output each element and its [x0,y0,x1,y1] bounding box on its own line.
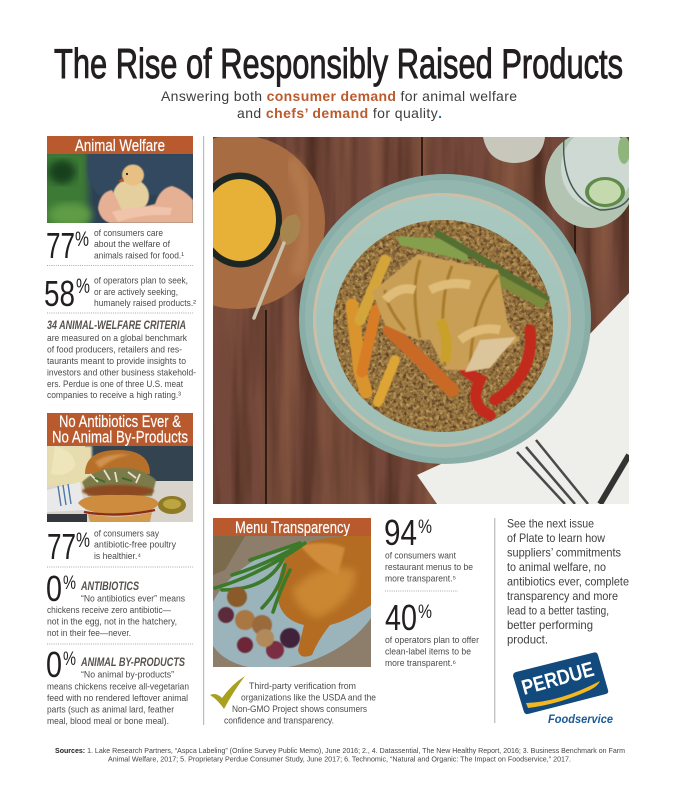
stat: 0% animal by-products: means chickens receive all-vegetarian [47,682,189,692]
text block: see the next issue: of Plate to learn how [507,531,605,545]
stat: 94% want transparent menus: % [418,517,432,538]
stat: 40% clean-label [385,597,479,668]
stat: 58% operators: of operators plan to seek, [94,276,188,286]
stat: 77% care about welfare: 77 [46,225,75,266]
text block: see the next issue: product. [507,632,548,646]
stat: 40% clean-label: of operators plan to offer [385,635,479,645]
stat: 0% antibiotics: % [63,573,76,594]
panel: animal welfare [40,136,196,400]
stat: 0% animal by-products: % [63,649,76,670]
text block: third-party verification: organizations like the USDA and the [241,692,376,702]
text block: see the next issue: suppliers’ commitments [507,546,621,560]
text block: see the next issue [507,516,629,646]
stat: 94% want transparent menus: 94 [384,512,417,553]
text block: 34 animal-welfare criteria: 34 ANIMAL-WELFARE CRITERIA [47,318,186,332]
stat: 0% animal by-products: feed with no rendered leftover animal [47,693,188,703]
stat: 77% care about welfare: animals raised for food.¹ [94,250,184,260]
text block: 34 animal-welfare criteria: investors and other business stakehold- [47,368,196,378]
hero photo: grain bowl on wood table [213,137,629,504]
icon: check mark [210,676,245,709]
heading: animal welfare: Animal Welfare [75,136,165,155]
stat: 40% clean-label: % [418,602,432,623]
stat: 58% operators [44,273,196,314]
text block: see the next issue: better performing [507,618,593,632]
stat: 94% want transparent menus: restaurant menus to be [385,562,473,572]
stat: 0% antibiotics: not in their fee—never. [47,628,131,638]
text block: 34 animal-welfare criteria [47,318,196,400]
text block: third-party verification: Third-party verification from [249,681,356,691]
stat: 77% antibiotic-free healthier: antibiotic-free poultry [94,540,177,550]
logo: perdue foodservice [513,652,614,726]
subtitle [161,88,517,121]
heading: menu transparency: Menu Transparency [235,518,350,537]
sources footnote: Sources: 1. Lake Research Partners, “Aspca Labeling” (Online Survey Public Memo), June 2016; 2., 4. Datassential, The New Healthy Report, 2016; 3. Business Benchmark on Farm [55,746,625,755]
stat: 77% care about welfare [46,225,184,266]
stat: 58% operators: humanely raised products.² [94,298,196,308]
text block: 34 animal-welfare criteria: companies to receive a high rating.³ [47,390,181,400]
sources footnote: Animal Welfare, 2017; 5. Proprietary Perdue Consumer Study, June 2017; 6. Technomic, “Natural and Organic: The Impact on Foodservice,” 2017. [108,754,571,764]
logo: perdue foodservice: Foodservice [548,714,614,726]
photo: chick in hands [47,154,193,223]
stat: 77% care about welfare: of consumers care [94,228,163,238]
stat: 40% clean-label: 40 [385,597,417,638]
text block: see the next issue: lead to a better tasting, [507,604,609,618]
panel: menu transparency [210,518,479,726]
stat: 40% clean-label: clean-label items to be [385,646,471,656]
text block: 34 animal-welfare criteria: are measured on a global benchmark [47,333,188,343]
sources footnote [55,746,625,764]
stat: 58% operators: 58 [44,273,75,314]
stat: 0% antibiotics: “No antibiotics ever” means [81,594,186,604]
text block: 34 animal-welfare criteria: of food producers, retailers and res- [47,344,182,354]
photo: roast chicken plate [213,536,371,667]
stat: 77% care about welfare: about the welfare of [94,239,171,249]
stat: 77% antibiotic-free healthier: 77 [47,526,76,567]
stat: 0% antibiotics: chickens receive zero antibiotic— [47,605,171,615]
stat: 58% operators: % [76,275,90,298]
text block: see the next issue: transparency and more [507,589,618,603]
photo: chicken sandwich [47,446,193,522]
stat: 0% antibiotics: ANTIBIOTICS [80,579,139,593]
text block: third-party verification [224,681,376,726]
stat: 94% want transparent menus: of consumers want [385,550,457,560]
stat: 0% animal by-products: ANIMAL BY-PRODUCTS [80,655,185,669]
text block: see the next issue: See the next issue [507,516,594,530]
stat: 58% operators: or are actively seeking, [94,287,178,297]
text block: 34 animal-welfare criteria: taurants meant to provide insights to [47,356,186,366]
stat: 40% clean-label: more transparent.⁶ [385,658,456,668]
subtitle: Answering both consumer demand for animal welfare [161,88,517,104]
heading: no antibiotics: No Antibiotics Ever & [59,412,181,431]
stat: 0% animal by-products: “No animal by-products” [81,670,174,680]
stat: 0% antibiotics: 0 [46,568,62,609]
text block: see the next issue: to animal welfare, no [507,560,606,574]
stat: 0% antibiotics [46,568,186,638]
stat: 0% animal by-products: parts (such as animal lard, feather [47,704,174,714]
logo: perdue foodservice: PERDUE [519,658,597,700]
stat: 94% want transparent menus [384,512,473,584]
stat: 94% want transparent menus: more transparent.⁵ [385,574,456,584]
stat: 0% animal by-products: meal, blood meal or bone meal). [47,716,169,726]
text block: third-party verification: confidence and transparency. [224,716,334,726]
stat: 77% antibiotic-free healthier [47,526,177,567]
stat: 0% animal by-products: 0 [46,644,62,685]
stat: 77% care about welfare: % [75,228,89,251]
panel: no antibiotics ever and no animal by-products [46,412,193,726]
text block: see the next issue: antibiotics ever, complete [507,574,629,588]
heading: no antibiotics [47,412,193,446]
text block: third-party verification: Non-GMO Project shows consumers [232,704,368,714]
stat: 0% antibiotics: not in the egg, not in the hatchery, [47,616,177,626]
subtitle: and chefs’ demand for quality. [237,105,442,121]
stat: 77% antibiotic-free healthier: of consumers say [94,528,160,538]
heading: no antibiotics: No Animal By-Products [52,428,188,446]
stat: 0% animal by-products [46,644,189,726]
stat: 77% antibiotic-free healthier: % [76,529,90,552]
column dividers [203,136,495,725]
stat: 77% antibiotic-free healthier: is healthier.⁴ [94,551,141,561]
text block: 34 animal-welfare criteria: ers. Perdue is one of three U.S. meat [47,379,184,389]
